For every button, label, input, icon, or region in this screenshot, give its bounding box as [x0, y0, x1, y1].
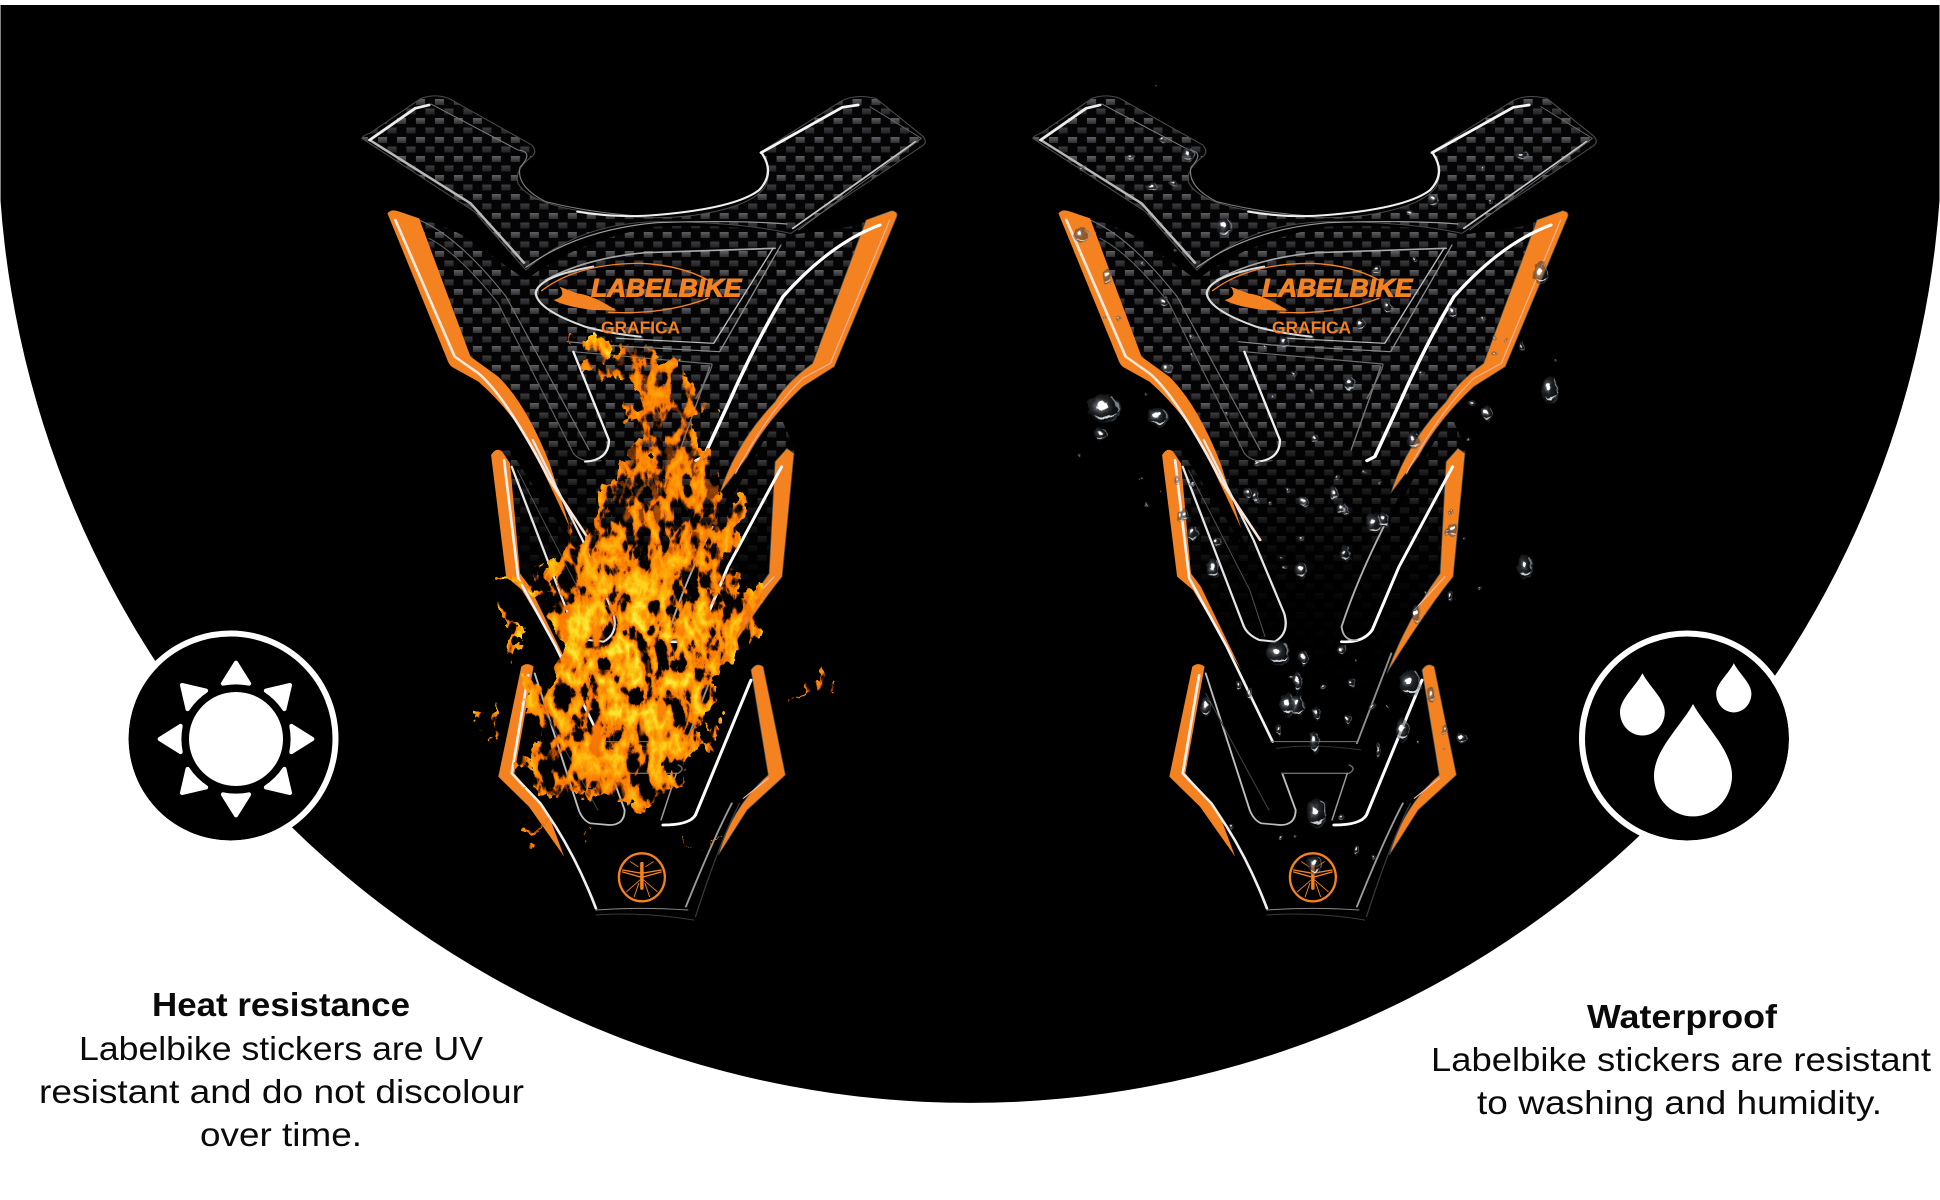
text block: heat resistance: over time. — [200, 1116, 362, 1153]
tank pad: waterproof with water drops — [1011, 96, 1604, 920]
text block: heat resistance: Labelbike stickers are UV — [79, 1030, 483, 1067]
tank pad: heat resistance with flames — [340, 96, 933, 920]
text block: heat resistance: Heat resistance — [152, 986, 410, 1023]
logo: Labelbike Grafica — [1262, 274, 1414, 338]
text block: waterproof: Waterproof — [1587, 998, 1778, 1035]
water drops on upper pad — [1074, 84, 1558, 535]
logo: Labelbike Grafica: LABELBIKE — [591, 274, 743, 302]
logo: Labelbike Grafica: GRAFICA — [601, 319, 680, 338]
logo: Labelbike Grafica — [591, 274, 743, 338]
icon: water drops in circle — [1582, 634, 1792, 844]
logo: Labelbike Grafica: GRAFICA — [1272, 319, 1351, 338]
text block: waterproof: to washing and humidity. — [1477, 1084, 1882, 1121]
text block: heat resistance: resistant and do not discolour — [39, 1073, 524, 1110]
text block: waterproof — [1431, 998, 1931, 1121]
flames — [478, 333, 834, 843]
icon: sun in circle — [126, 634, 336, 844]
text block: waterproof: Labelbike stickers are resistant — [1431, 1041, 1931, 1078]
text block: heat resistance — [39, 986, 524, 1153]
logo: Labelbike Grafica: LABELBIKE — [1262, 274, 1414, 302]
water drops on lower pad — [1078, 454, 1533, 875]
